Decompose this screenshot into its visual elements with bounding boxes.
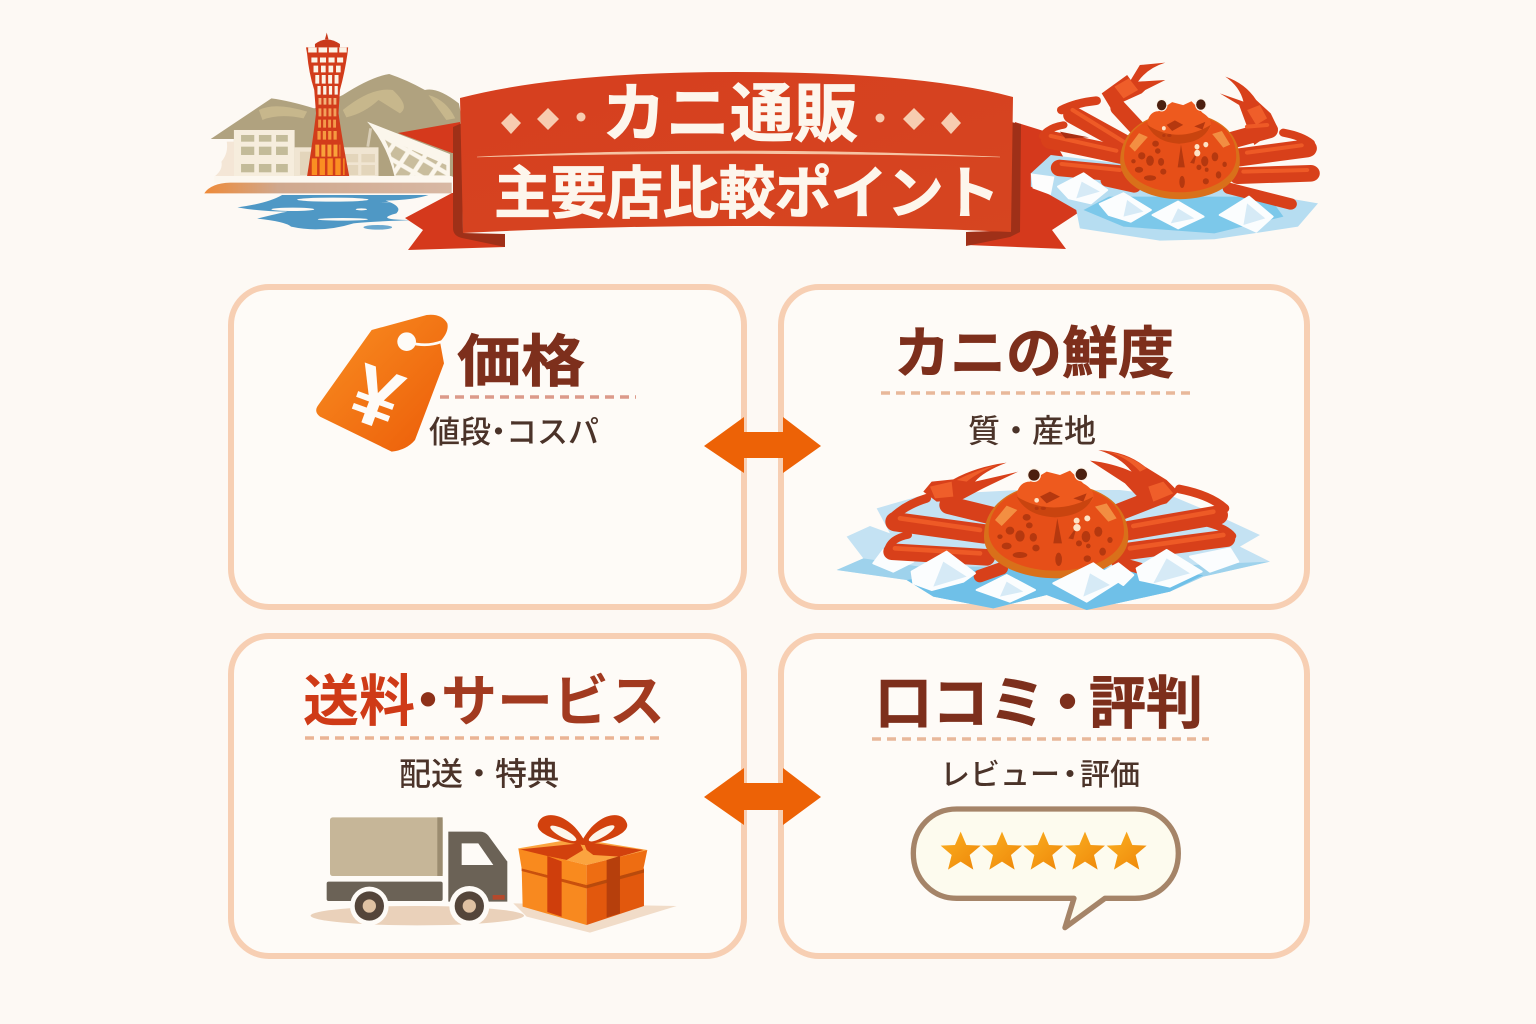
panel: crab freshness xyxy=(781,287,1307,610)
heading: reviews: 口コミ・評判 xyxy=(875,672,1203,736)
maritime museum xyxy=(367,122,450,177)
illustration: Kobe port tower and harbour xyxy=(204,33,464,230)
title banner xyxy=(398,72,1090,250)
harbour water xyxy=(237,195,450,230)
arrow: top double-headed xyxy=(704,417,821,473)
card frame xyxy=(781,287,1307,607)
heading: freshness: カニの鮮度 xyxy=(894,322,1174,385)
icon: yen price tag: ¥ xyxy=(339,346,414,449)
tower structure xyxy=(306,33,349,176)
ribbon folds xyxy=(453,122,1021,247)
panel: shipping and service xyxy=(231,636,744,956)
heading: price: 価格 xyxy=(457,330,585,393)
arrow: bottom double-headed xyxy=(704,768,821,825)
subheading: freshness: 質・産地 xyxy=(968,413,1096,449)
ribbon tail: left xyxy=(398,122,505,250)
card frame xyxy=(231,287,744,607)
panel: reviews and reputation xyxy=(781,636,1307,956)
ribbon tail: right xyxy=(967,122,1090,249)
dashed divider xyxy=(305,736,662,740)
subheading: reviews: レビュー・評価 xyxy=(940,759,1140,792)
icon: yen price tag xyxy=(316,315,448,452)
subheading: shipping and service: 配送・特典 xyxy=(399,756,559,792)
title decorations xyxy=(501,108,961,134)
title line 2: 主要店比較ポイント xyxy=(494,162,1000,226)
panel: price xyxy=(231,287,744,607)
heading: shipping and service: 送料・サービス xyxy=(303,670,665,733)
illustration: crab on ice (header) xyxy=(1031,63,1318,241)
subheading: price: 値段・コスパ xyxy=(429,415,599,450)
card frame xyxy=(781,636,1307,956)
dashed divider xyxy=(881,391,1196,395)
icon: delivery truck and gift xyxy=(311,815,677,933)
icon: speech bubble with stars xyxy=(913,809,1178,928)
dashed divider xyxy=(872,737,1209,741)
dashed divider xyxy=(440,395,636,399)
illustration: crab on ice xyxy=(837,450,1270,610)
title line 1: カニ通販 xyxy=(602,78,858,150)
banner body xyxy=(460,72,1013,233)
card frame xyxy=(231,636,744,956)
